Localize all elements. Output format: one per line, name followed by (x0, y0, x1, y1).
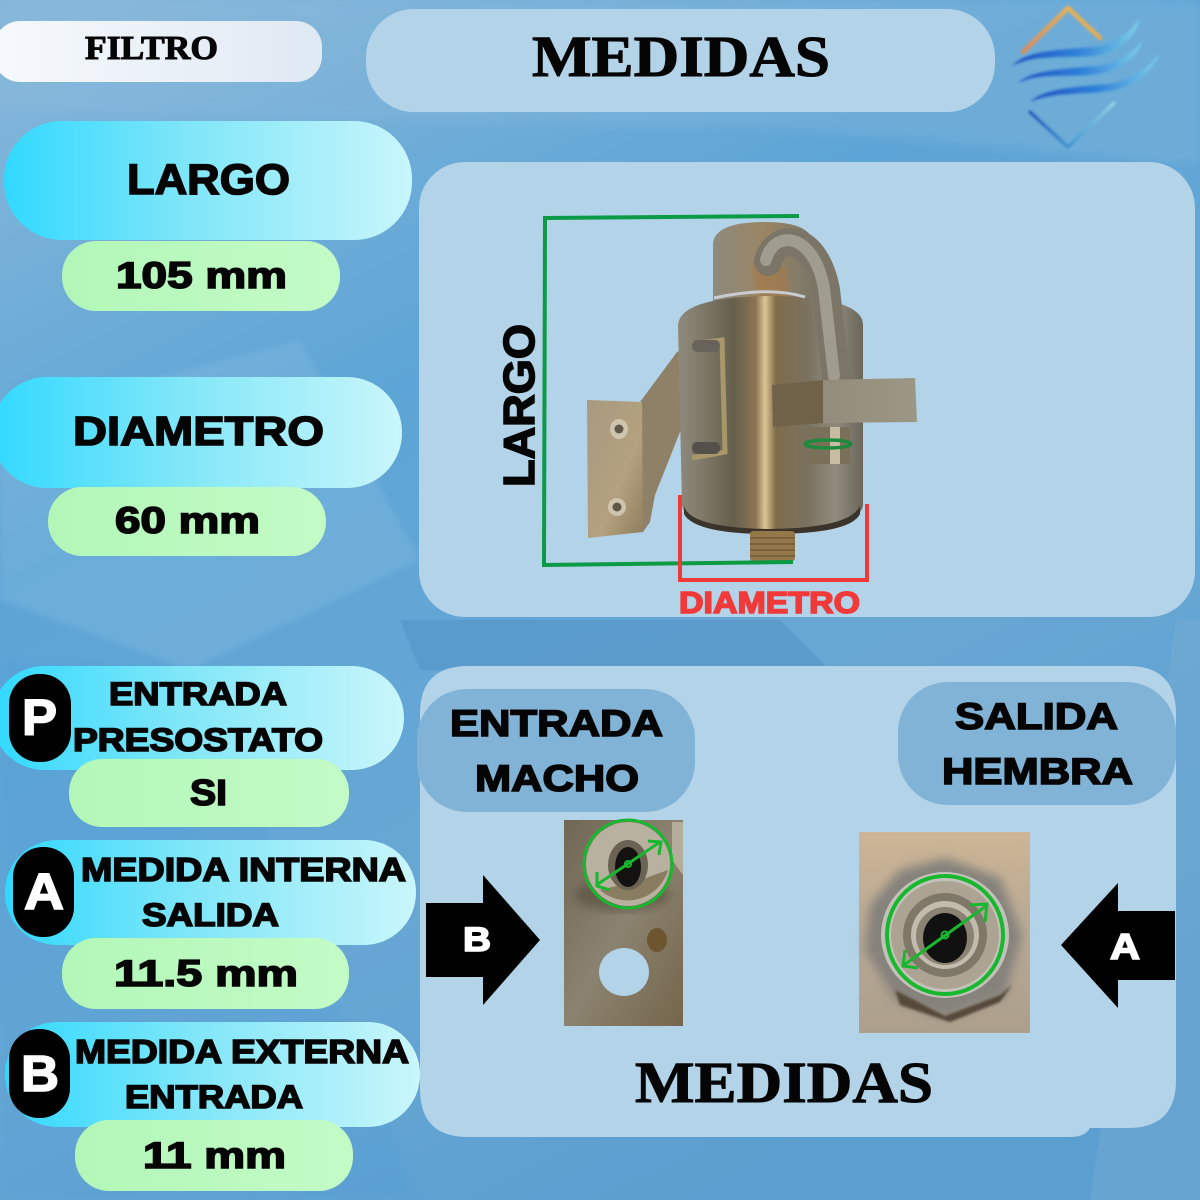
panel: product photo (419, 162, 1195, 620)
badge: P (9, 674, 71, 762)
label: entrada presostato: ENTRADA (109, 676, 287, 712)
value: 60 mm: 60 mm (115, 500, 260, 541)
label: medida externa entrada: MEDIDA EXTERNA (75, 1033, 409, 1070)
logo (1012, 8, 1160, 147)
value: 105 mm (62, 241, 340, 311)
panel: connections (417, 666, 1176, 1137)
title: medidas (366, 9, 995, 112)
value: 60 mm (48, 487, 326, 556)
heading: medidas: MEDIDAS (635, 1050, 933, 1115)
measure: diametro bracket (680, 495, 867, 580)
label: medida externa entrada: ENTRADA (125, 1079, 303, 1115)
title pill: filtro: FILTRO (85, 30, 218, 67)
photo: filter (587, 222, 917, 561)
label: largo vertical: LARGO (495, 324, 544, 487)
badge: P: P (22, 689, 57, 746)
title: medidas: MEDIDAS (532, 24, 830, 89)
label: diametro (0, 377, 402, 488)
label: entrada macho: MACHO (475, 758, 639, 799)
label: salida hembra (898, 682, 1176, 805)
label: diametro: DIAMETRO (73, 408, 324, 454)
badge: A (13, 847, 74, 937)
label: salida hembra: SALIDA (955, 696, 1118, 737)
arrow: A: A (1110, 926, 1140, 967)
label: entrada presostato: PRESOSTATO (73, 722, 323, 758)
label: diametro red: DIAMETRO (679, 585, 860, 620)
label: medida interna salida: MEDIDA INTERNA (81, 851, 406, 888)
label: medida externa entrada (5, 1022, 420, 1127)
value: 105 mm: 105 mm (116, 255, 287, 296)
badge: A: A (24, 863, 64, 920)
label: medida interna salida: SALIDA (142, 897, 279, 933)
photo: female outlet (859, 832, 1030, 1033)
label: entrada macho (417, 689, 695, 812)
value: 11.5 mm: 11.5 mm (114, 953, 298, 994)
value: 11 mm: 11 mm (143, 1135, 286, 1176)
label: entrada presostato (0, 666, 404, 770)
title pill: filtro (0, 21, 322, 82)
label: medida interna salida (5, 840, 416, 945)
arrow: B: B (463, 921, 491, 959)
photo: male inlet (564, 820, 683, 1026)
measure: largo bracket (544, 216, 799, 565)
arrow: A (1061, 883, 1175, 1008)
label: entrada macho: ENTRADA (450, 703, 663, 744)
badge: B (9, 1029, 70, 1118)
label: largo (4, 121, 412, 240)
badge: B: B (21, 1045, 59, 1102)
value: 11.5 mm (62, 938, 349, 1009)
value: 11 mm (75, 1120, 353, 1191)
arrow: B (426, 875, 540, 1005)
label: salida hembra: HEMBRA (942, 751, 1133, 792)
label: largo: LARGO (127, 156, 290, 204)
value: si (69, 759, 349, 827)
value: si: SI (190, 772, 227, 813)
